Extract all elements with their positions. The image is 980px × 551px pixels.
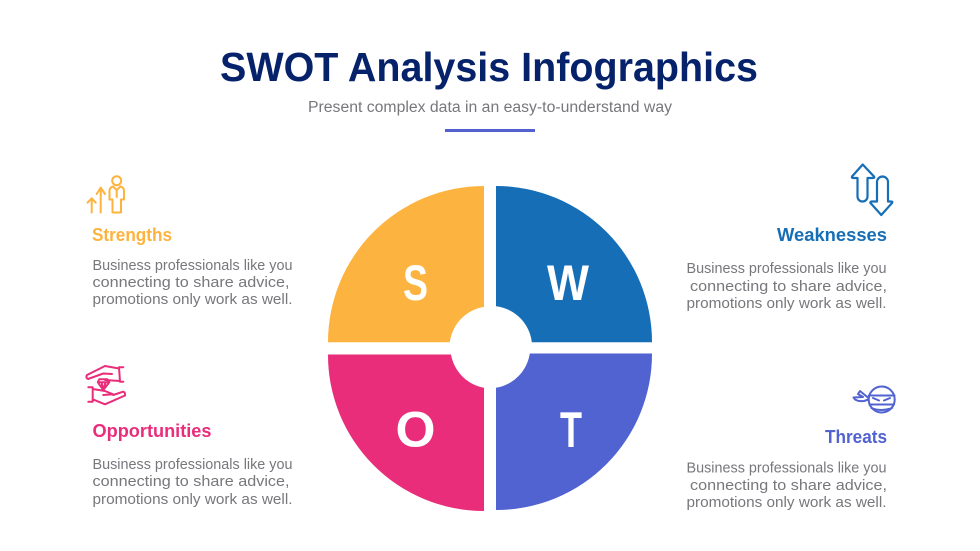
- body text: promotions only work as well.: [686, 494, 886, 511]
- quadrant: strengths: [328, 186, 484, 342]
- heading: Opportunities: [92, 421, 212, 441]
- letter S: S: [403, 255, 428, 311]
- body text: Business professionals like you: [686, 260, 886, 277]
- panel: threats: [686, 386, 895, 511]
- icon: ninja head: [854, 386, 895, 412]
- body text: [686, 260, 887, 312]
- icon: hands holding diamond: [86, 366, 125, 404]
- quadrant: threats: [496, 354, 652, 510]
- body text: Business professionals like you: [686, 460, 886, 476]
- body text: promotions only work as well.: [92, 291, 292, 308]
- quadrant: weaknesses: [496, 186, 652, 342]
- heading: Weaknesses: [777, 225, 887, 245]
- quadrant: opportunities: [328, 354, 484, 511]
- heading: Strengths: [92, 225, 172, 245]
- icon: person with rising arrows: [88, 176, 124, 212]
- body text: connecting to share advice,: [690, 279, 887, 295]
- letter O: O: [396, 402, 436, 458]
- title underline: [445, 129, 535, 132]
- letter T: T: [560, 402, 582, 458]
- icon: up and down arrows: [852, 164, 892, 215]
- panel: strengths: [88, 176, 292, 308]
- subtitle: Present complex data in an easy-to-understand way: [308, 99, 672, 116]
- body text: connecting to share advice,: [92, 275, 290, 291]
- body text: connecting to share advice,: [92, 474, 290, 490]
- body text: connecting to share advice,: [690, 478, 887, 494]
- body text: promotions only work as well.: [92, 491, 292, 508]
- body text: [92, 257, 292, 308]
- body text: [686, 460, 887, 511]
- body text: Business professionals like you: [92, 257, 292, 274]
- panel: opportunities: [86, 366, 292, 508]
- heading: Threats: [825, 427, 887, 447]
- letter W: W: [547, 255, 590, 311]
- panel: SWOT circle: [328, 186, 652, 511]
- panel: weaknesses: [686, 164, 892, 312]
- title: SWOT Analysis Infographics: [220, 44, 758, 90]
- body text: Business professionals like you: [92, 456, 292, 473]
- body text: [92, 456, 292, 508]
- body text: promotions only work as well.: [686, 295, 886, 312]
